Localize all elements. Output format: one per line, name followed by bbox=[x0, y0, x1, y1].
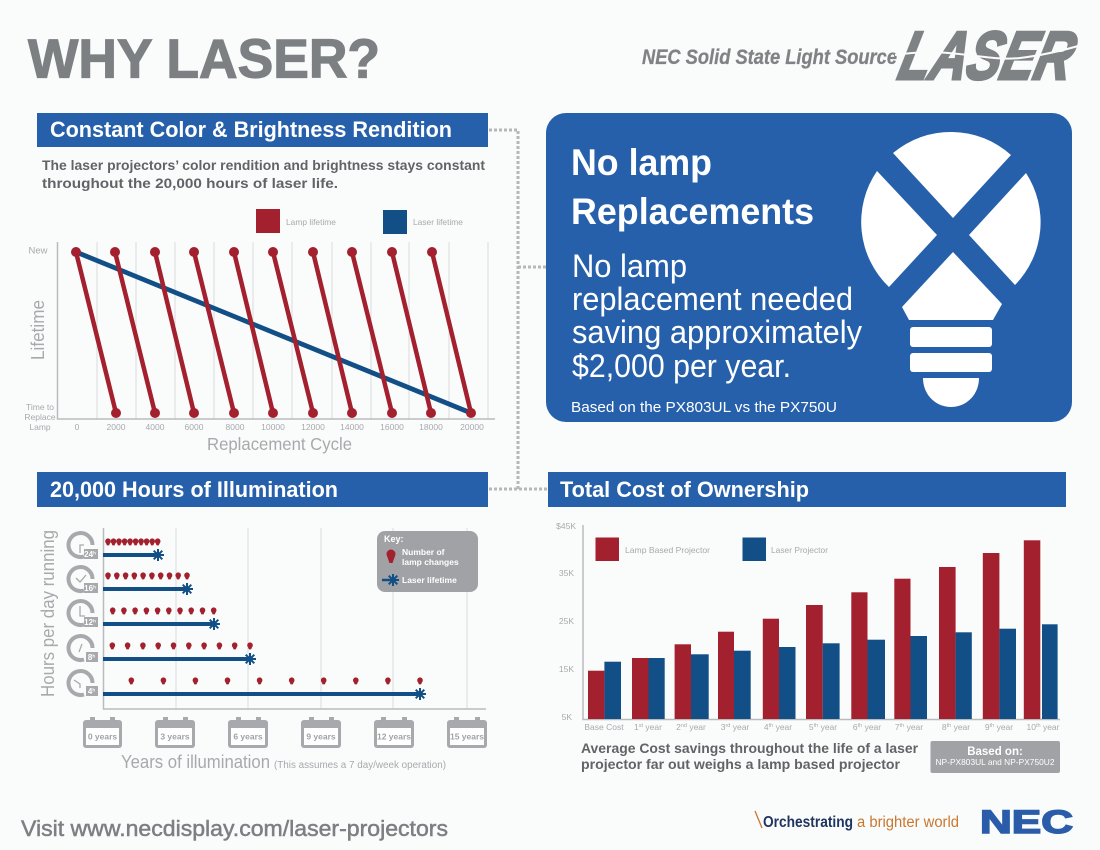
x axis calendars: 6 years bbox=[233, 732, 263, 742]
tagline: Orchestrating a brighter world bbox=[755, 811, 959, 831]
axis labels: lifetime chart: 14000 bbox=[340, 422, 364, 432]
text block: average cost savings: projector far out weighs a lamp based projector bbox=[581, 756, 901, 772]
text block: color rendition description bbox=[42, 158, 486, 191]
logo: NEC: NEC bbox=[980, 804, 1073, 840]
callout: key: lamp changes bbox=[402, 557, 459, 567]
x axis labels: year bbox=[643, 722, 662, 732]
x axis labels: year bbox=[951, 722, 970, 732]
bars: laser projector bbox=[604, 624, 1058, 719]
y axis labels bbox=[556, 521, 576, 722]
x axis labels: 6 bbox=[853, 722, 858, 732]
legend: lifetime chart: Laser lifetime bbox=[413, 217, 463, 227]
chart: lifetime vs replacement cycle: Lifetime bbox=[28, 300, 48, 360]
panel heading bbox=[571, 142, 814, 232]
heading: 20,000 Hours of Illumination: 20,000 Hours of Illumination bbox=[50, 477, 338, 502]
footer link text: Visit www.necdisplay.com/laser-projectors bbox=[21, 816, 448, 841]
x axis title bbox=[121, 752, 446, 772]
panel body text: No lamp bbox=[572, 248, 687, 284]
axis labels: lifetime chart: 16000 bbox=[380, 422, 404, 432]
callout: key: Number of bbox=[402, 547, 445, 557]
callout: based on models: Based on: bbox=[967, 746, 1023, 758]
axis labels: lifetime chart: Replace bbox=[24, 412, 56, 422]
bars: lamp based projector bbox=[588, 540, 1040, 719]
x axis calendars: 15 years bbox=[450, 732, 484, 742]
icon: crossed-out light bulb bbox=[861, 132, 1041, 407]
x axis calendars: 3 years bbox=[160, 732, 190, 742]
chart: lifetime vs replacement cycle bbox=[24, 209, 495, 454]
x axis labels: nd bbox=[681, 723, 687, 729]
legend: cost chart: Lamp Based Projector bbox=[625, 545, 710, 555]
chart: lifetime vs replacement cycle: Replacement Cycle bbox=[207, 434, 352, 454]
panel: no lamp replacements bbox=[546, 113, 1072, 422]
y axis labels: 15K bbox=[559, 664, 574, 674]
x axis title: (This assumes a 7 day/week operation) bbox=[274, 760, 446, 771]
text block: color rendition description: The laser projectors’ color rendition and brightness stays constant bbox=[42, 158, 486, 173]
y axis labels: 35K bbox=[559, 568, 574, 578]
axis labels: lifetime chart: Lamp bbox=[29, 422, 51, 432]
heading: Total Cost of Ownership bbox=[548, 472, 1066, 507]
lamp change markers bbox=[105, 538, 423, 684]
text block: average cost savings: Average Cost savings throughout the life of a laser bbox=[581, 740, 919, 756]
panel heading: No lamp bbox=[571, 142, 712, 183]
x axis labels: year bbox=[862, 722, 881, 732]
x axis labels: 7 bbox=[895, 722, 900, 732]
y axis labels: $45K bbox=[556, 521, 576, 531]
x axis labels: th bbox=[900, 723, 904, 729]
lamp lifetime lines bbox=[76, 252, 471, 413]
x axis labels: year bbox=[904, 722, 923, 732]
header tagline: NEC Solid State Light Source bbox=[642, 46, 897, 69]
y axis title: Hours per day running bbox=[38, 530, 58, 697]
axis labels: lifetime chart: 12000 bbox=[301, 422, 325, 432]
axis labels: lifetime chart: New bbox=[28, 246, 48, 256]
laser lifetime line bbox=[76, 252, 471, 413]
x axis labels: st bbox=[639, 723, 644, 729]
x axis labels: th bbox=[1036, 723, 1041, 729]
x axis calendars: 12 years bbox=[377, 732, 411, 742]
tagline: Orchestrating a brighter world: a brighter world bbox=[857, 814, 959, 831]
panel footnote: Based on the PX803UL vs the PX750U bbox=[571, 399, 837, 416]
x axis title: Years of illumination bbox=[121, 752, 270, 772]
icons: clocks: 16 bbox=[84, 584, 93, 593]
axis labels: lifetime chart: 6000 bbox=[185, 422, 204, 432]
legend: lifetime chart bbox=[256, 209, 463, 234]
x axis labels: 10 bbox=[1027, 722, 1036, 732]
x axis labels: 8 bbox=[942, 722, 947, 732]
x axis labels: year bbox=[730, 722, 749, 732]
x axis labels: 9 bbox=[985, 722, 990, 732]
x axis labels: year bbox=[1041, 722, 1060, 732]
callout: based on models: NP-PX803UL and NP-PX750U2 bbox=[936, 757, 1055, 767]
text block: average cost savings bbox=[581, 740, 919, 772]
x axis calendars: 9 years bbox=[306, 732, 336, 742]
x axis labels: 4 bbox=[764, 722, 769, 732]
icons: clocks: h bbox=[93, 550, 96, 556]
x axis labels: year bbox=[773, 722, 792, 732]
heading: Constant Color & Brightness Rendition: Constant Color & Brightness Rendition bbox=[50, 117, 452, 142]
callout: key bbox=[377, 531, 478, 592]
legend: cost chart bbox=[596, 538, 828, 561]
icons: clocks: 24 bbox=[84, 550, 93, 559]
dotted connector bbox=[489, 130, 548, 489]
axis labels: lifetime chart: 20000 bbox=[460, 422, 484, 432]
laser lifetime bars bbox=[103, 555, 420, 694]
callout: based on models bbox=[930, 741, 1060, 773]
x axis labels: th bbox=[814, 723, 818, 729]
chart: hours per day vs years of illumination bbox=[38, 528, 487, 772]
chart: total cost of ownership bbox=[556, 521, 1060, 732]
icons: clocks: h bbox=[93, 584, 96, 590]
x axis labels: rd bbox=[725, 723, 730, 729]
x axis labels: th bbox=[990, 723, 994, 729]
x axis labels: year bbox=[994, 722, 1013, 732]
callout: key: Laser lifetime bbox=[402, 575, 457, 585]
heading: Constant Color & Brightness Rendition bbox=[37, 113, 488, 147]
axis labels: lifetime chart: 8000 bbox=[226, 422, 245, 432]
icons: clocks: 8 bbox=[88, 653, 92, 662]
legend: lifetime chart: Lamp lifetime bbox=[286, 217, 336, 227]
x axis calendars bbox=[83, 717, 487, 748]
tagline: Orchestrating a brighter world: Orchestrating bbox=[763, 814, 853, 831]
x axis labels: 5 bbox=[809, 722, 814, 732]
panel body text: replacement needed bbox=[572, 281, 853, 317]
axis labels: lifetime chart: 4000 bbox=[146, 422, 165, 432]
icons: clocks: h bbox=[92, 688, 95, 692]
x axis labels bbox=[584, 722, 1060, 732]
icons: clocks: h bbox=[93, 618, 96, 624]
x axis labels: year bbox=[818, 722, 837, 732]
axis labels: lifetime chart bbox=[24, 246, 484, 432]
icons: clocks: 12 bbox=[84, 618, 93, 627]
panel body text: $2,000 per year. bbox=[572, 348, 791, 384]
heading: 20,000 Hours of Illumination bbox=[37, 472, 488, 507]
x axis labels: 1 bbox=[634, 722, 639, 732]
icons: clocks: h bbox=[92, 654, 95, 658]
y axis labels: 25K bbox=[559, 616, 574, 626]
panel body text: saving approximately bbox=[572, 314, 862, 350]
icons: clocks bbox=[69, 533, 98, 696]
axis labels: lifetime chart: 2000 bbox=[107, 422, 126, 432]
axis labels: lifetime chart: 0 bbox=[75, 422, 80, 432]
x axis labels: th bbox=[858, 723, 862, 729]
x axis calendars: 0 years bbox=[88, 732, 117, 742]
x axis labels: 2 bbox=[676, 722, 681, 732]
axis labels: lifetime chart: 10000 bbox=[261, 422, 285, 432]
heading: Total Cost of Ownership: Total Cost of Ownership bbox=[560, 477, 809, 502]
x axis labels: 3 bbox=[721, 722, 725, 732]
title: WHY LASER? bbox=[28, 28, 380, 90]
x axis labels: th bbox=[769, 723, 773, 729]
x axis labels: th bbox=[947, 723, 951, 729]
legend: cost chart: Laser Projector bbox=[771, 545, 828, 555]
panel body text bbox=[572, 248, 862, 384]
y axis labels: 5K bbox=[562, 712, 572, 722]
icons: clocks: 4 bbox=[88, 687, 92, 696]
axis labels: lifetime chart: Time to bbox=[26, 402, 54, 412]
callout: key: Key: bbox=[384, 534, 404, 544]
x axis labels: year bbox=[687, 722, 706, 732]
text block: color rendition description: throughout the 20,000 hours of laser life. bbox=[42, 176, 338, 191]
x axis labels: Base Cost bbox=[584, 722, 624, 732]
panel heading: Replacements bbox=[571, 191, 814, 232]
axis labels: lifetime chart: 18000 bbox=[419, 422, 443, 432]
